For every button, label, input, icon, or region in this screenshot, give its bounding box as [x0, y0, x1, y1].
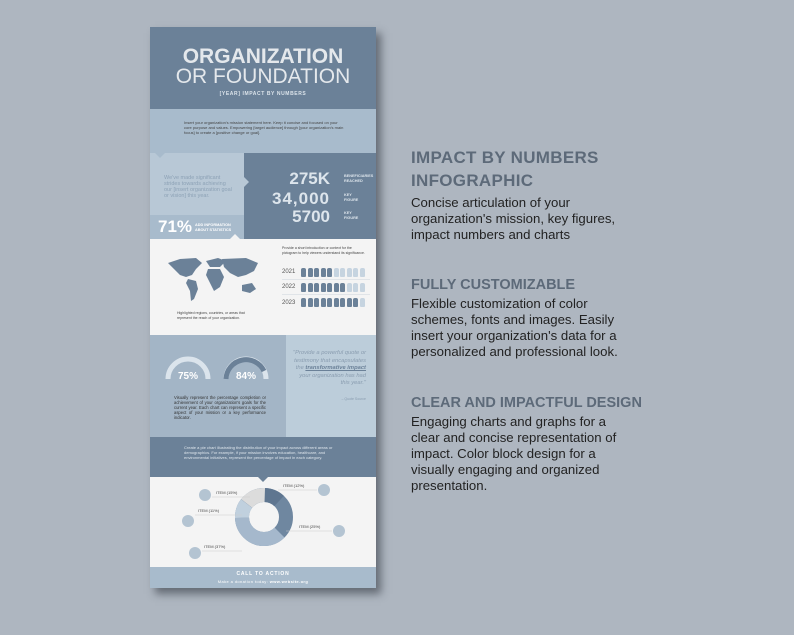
- map section: Highlighted regions, countries, or areas that represent the reach of your organization.: [177, 311, 245, 320]
- donut chart: ITEM (11%): [198, 508, 220, 513]
- stat 71%: ADD INFORMATION: [195, 223, 231, 227]
- feature 1: Concise articulation of your organization's mission, key figures, impact numbers and charts: [411, 195, 615, 242]
- feature 3: CLEAR AND IMPACTFUL DESIGN: [411, 395, 642, 411]
- feature 3: Engaging charts and graphs for a clear and concise representation of impact. Color block design for a visually engaging and organized presentation.: [411, 414, 616, 493]
- feature 1: IMPACT BY NUMBERS: [411, 148, 599, 167]
- stats right: [244, 153, 376, 239]
- stats left: [150, 153, 244, 239]
- stats right: KEY: [344, 193, 352, 197]
- gauges section: 75%: [178, 371, 198, 382]
- mission statement: Insert your organization's mission statement here. Keep it concise and focused on your core purpose and values. Empowering [target audience] through [your organization's main focus] to create a [positive change or goal].: [184, 120, 343, 135]
- quote: [286, 335, 376, 437]
- donut chart: ITEM (15%): [216, 490, 238, 495]
- world map: [168, 258, 258, 301]
- pictogram: 2022: [282, 284, 295, 290]
- quote: – Quote Source: [341, 396, 366, 400]
- stats right: KEY: [344, 211, 352, 215]
- pictogram: 2021: [282, 269, 295, 275]
- stats left: We've made significant strides towards achieving our [insert organization goal or vision] this year.: [164, 175, 232, 199]
- stat 71%: ABOUT STATISTICS: [195, 228, 231, 232]
- stats right: FIGURE: [344, 198, 358, 202]
- pictogram: 2023: [282, 300, 295, 306]
- mission statement: [150, 109, 376, 153]
- call to action: Make a donation today: www.website.org: [218, 579, 308, 584]
- feature 1: INFOGRAPHIC: [411, 171, 533, 190]
- title: ORGANIZATION: [183, 45, 343, 68]
- call to action: CALL TO ACTION: [236, 571, 290, 577]
- arrow notches: [156, 153, 249, 239]
- gauges section: Visually represent the percentage completion or achievement of your organization's goals for the current year. Each chart can represent a specific aspect of your mission or a key performance indicator.: [174, 395, 266, 420]
- map section: [150, 239, 376, 335]
- donut chart: ITEM (12%): [283, 483, 305, 488]
- donut chart: ITEM (37%): [204, 544, 226, 549]
- stat 71%: 71%: [158, 217, 192, 236]
- stat 71%: [150, 215, 244, 239]
- subtitle: [YEAR] IMPACT BY NUMBERS: [220, 91, 306, 97]
- gauges section: 84%: [236, 371, 256, 382]
- pie text band: Create a pie chart illustrating the distribution of your impact across different areas or demographics. For example, if your mission involves education, healthcare, and environmental initiatives, represent the percentage of impact in each category.: [184, 445, 332, 460]
- donut chart: ITEM (25%): [299, 524, 321, 529]
- stats right: BENEFICIARIES: [344, 174, 373, 178]
- header: [150, 27, 376, 109]
- infographic card: [150, 27, 376, 588]
- stats right: REACHED: [344, 179, 363, 183]
- donut chart: [182, 477, 345, 559]
- gauges section: [150, 335, 286, 437]
- title: OR FOUNDATION: [176, 65, 350, 88]
- feature 1: [411, 148, 615, 242]
- title: [176, 45, 350, 88]
- stats right: 275K: [289, 169, 330, 188]
- stats right: 34,000: [272, 189, 330, 208]
- map section: Provide a short introduction or context for the pictogram to help viewers understand its significance.: [282, 246, 365, 255]
- quote: "Provide a powerful quote or testimony that encapsulates the transformative impact your organization has had this year.": [293, 350, 366, 386]
- call to action: [150, 567, 376, 588]
- stats right: FIGURE: [344, 216, 358, 220]
- stats right: 5700: [292, 207, 330, 226]
- pictogram: [282, 268, 370, 307]
- feature 2: Flexible customization of color schemes, fonts and images. Easily insert your organization's data for a personalized and professional look.: [411, 296, 618, 359]
- pie text band: [150, 437, 376, 477]
- feature 2: FULLY CUSTOMIZABLE: [411, 277, 575, 293]
